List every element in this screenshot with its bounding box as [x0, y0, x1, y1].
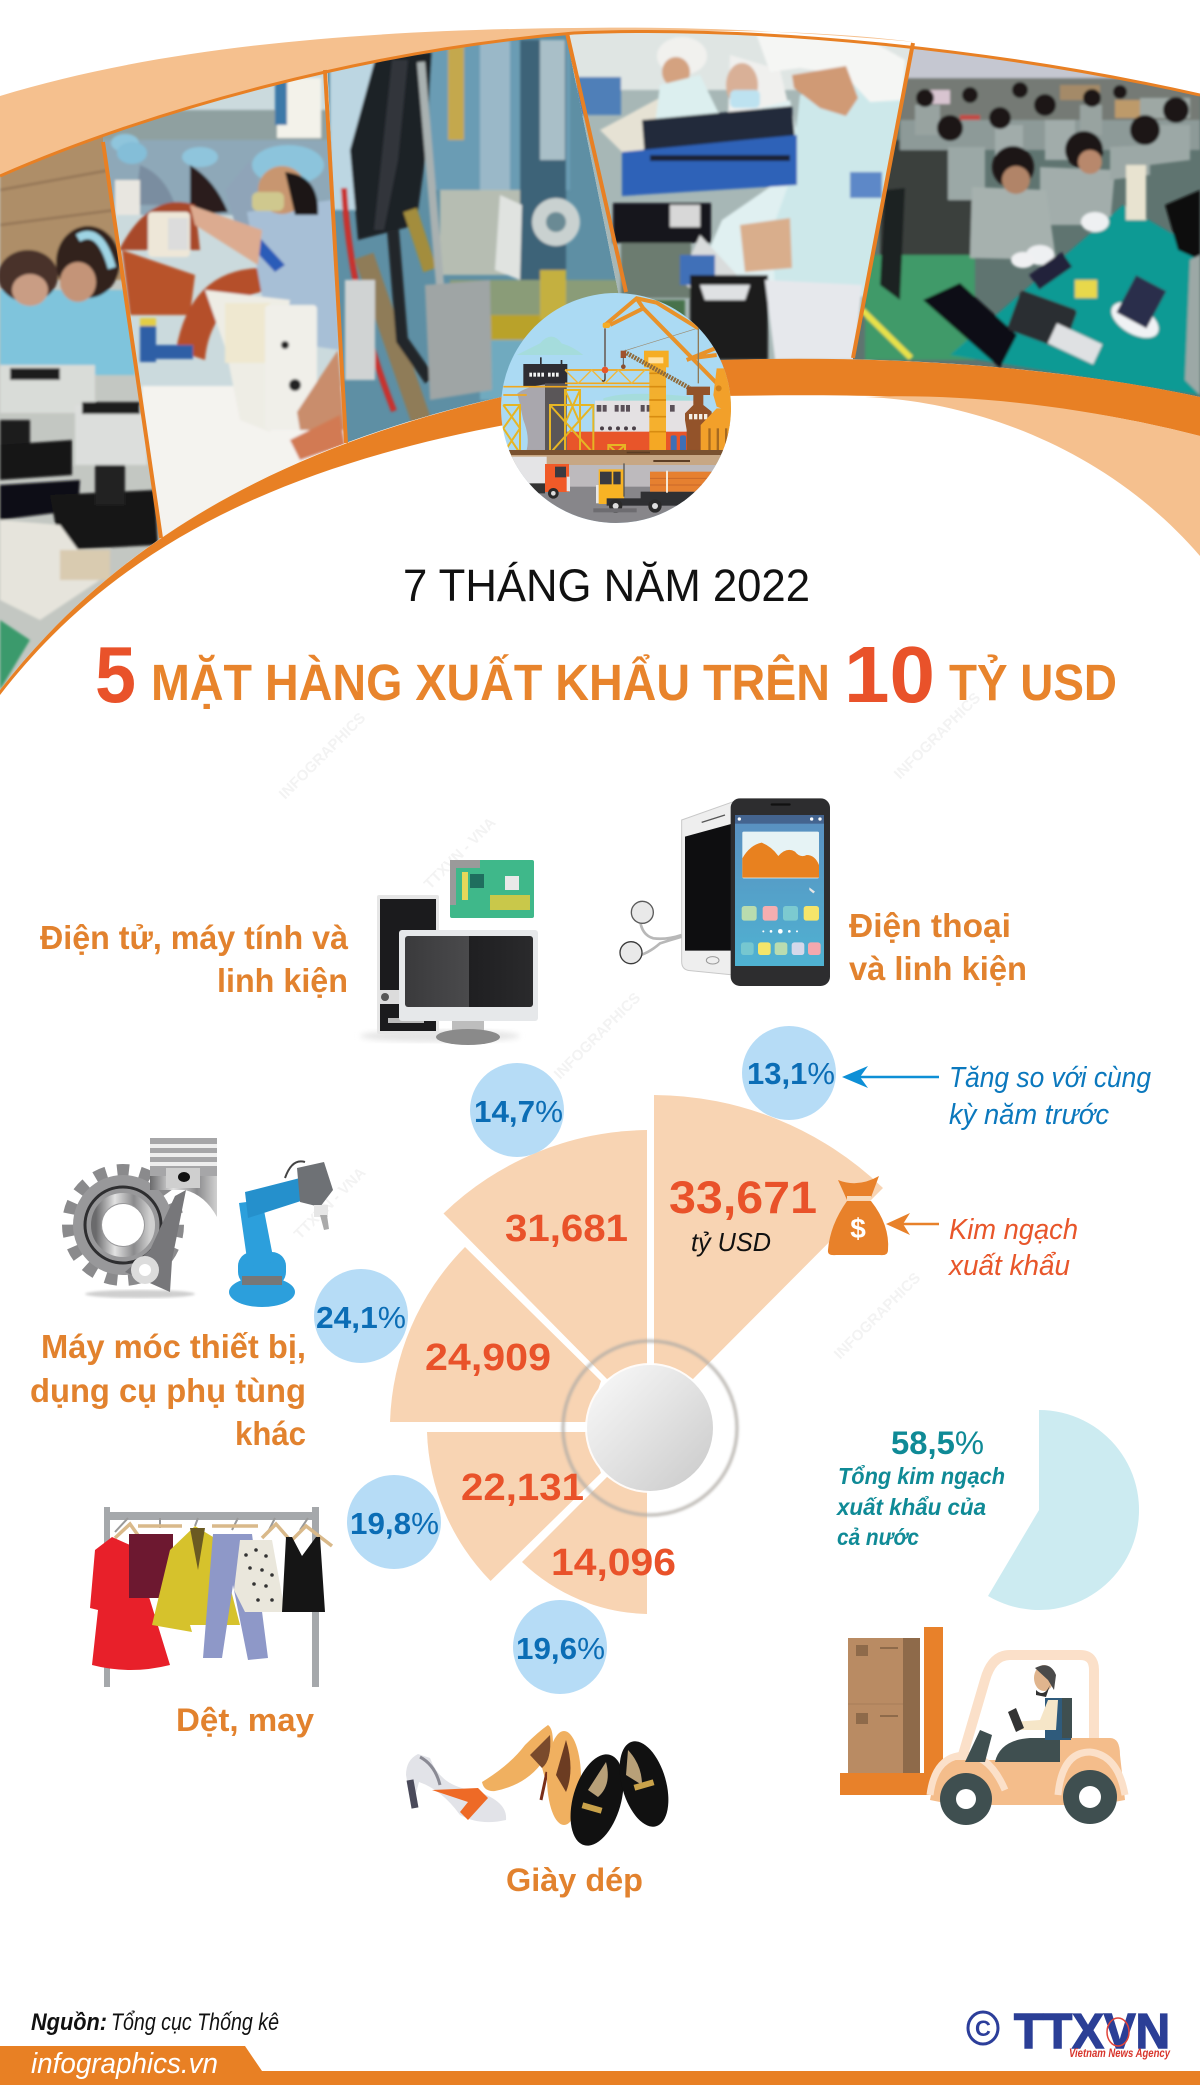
arrow: growth legend — [842, 1066, 939, 1088]
label: electronics: linh kiện — [217, 962, 348, 999]
text: export legend — [947, 1214, 1078, 1282]
main title — [95, 630, 1117, 719]
growth bubble 13,1% — [742, 1026, 836, 1120]
main title: 5 — [95, 630, 136, 719]
watermark: INFOGRAPHICS — [891, 689, 984, 783]
values: 22,131 — [461, 1467, 584, 1509]
icon: forklift — [840, 1627, 1125, 1825]
sector: footwear 14,096 — [522, 1477, 647, 1614]
photo borders — [0, 32, 1200, 538]
values: 33,671 — [669, 1172, 817, 1223]
icon: port industrial circle — [500, 290, 737, 527]
text: growth legend: kỳ năm trước — [949, 1099, 1109, 1131]
icon: robot arm — [229, 1161, 333, 1307]
text: growth legend: Tăng so với cùng — [949, 1062, 1151, 1094]
photo: shoe factory — [0, 137, 161, 690]
source: Nguồn: — [31, 2009, 107, 2036]
growth bubble 13,1%: 13,1% — [747, 1056, 835, 1091]
growth bubble 14,7%: 14,7% — [474, 1094, 563, 1129]
growth bubble 19,8%: 19,8% — [350, 1506, 439, 1541]
watermark — [276, 689, 984, 1363]
icon: clothes rack — [90, 1507, 332, 1687]
icon: shoes — [406, 1725, 677, 1852]
sector: textiles 22,131 — [427, 1432, 601, 1581]
main title: 10 — [844, 630, 935, 719]
label: electronics: Điện tử, máy tính và — [40, 919, 349, 956]
photo: electronics assembly — [570, 33, 910, 360]
watermark: TTXVN - VNA — [291, 1164, 370, 1243]
watermark: INFOGRAPHICS — [551, 989, 644, 1083]
text: export legend: Kim ngạch — [949, 1214, 1078, 1246]
photo strip — [0, 20, 1200, 720]
icon: gear and piston — [68, 1138, 217, 1298]
icon: smartphones — [620, 798, 830, 986]
label: machinery: Máy móc thiết bị, — [41, 1328, 306, 1365]
text: growth legend — [949, 1062, 1151, 1131]
label: footwear: Giày dép — [506, 1862, 643, 1898]
growth bubble 19,8% — [347, 1475, 441, 1569]
label: electronics — [40, 919, 349, 999]
logo: TTXVN: C — [975, 2016, 991, 2041]
values: 14,096 — [551, 1542, 676, 1584]
values: 31,681 — [505, 1208, 628, 1250]
watermark: TTXVN - VNA — [421, 814, 500, 893]
text: export legend: xuất khẩu — [947, 1250, 1070, 1282]
title line: 7 THÁNG NĂM 2022 — [403, 560, 810, 611]
text: share of national export: 58,5% — [891, 1425, 984, 1461]
text: share of national export: Tổng kim ngạch — [838, 1463, 1005, 1489]
sector: phones 33,671 — [654, 1095, 883, 1379]
label: phones: Điện thoại — [849, 907, 1011, 944]
label: machinery: dụng cụ phụ tùng — [30, 1372, 306, 1409]
label: phones — [849, 907, 1027, 987]
label: machinery — [30, 1328, 306, 1452]
values — [425, 1172, 817, 1584]
icon: computer — [360, 860, 538, 1045]
logo: TTXVN: TTXVN — [1014, 2005, 1170, 2059]
orange band left — [0, 395, 510, 695]
photo: machinery hoses — [328, 35, 618, 442]
main title: TỶ USD — [949, 653, 1117, 711]
growth bubble 14,7% — [470, 1063, 564, 1157]
center hub — [563, 1341, 737, 1515]
photo: garment sewing — [103, 74, 346, 536]
logo: TTXVN: Vietnam News Agency — [1069, 2048, 1170, 2060]
top light orange arc — [0, 28, 915, 176]
text: share of national export: cả nước — [837, 1524, 919, 1550]
values: 24,909 — [425, 1337, 551, 1379]
unit: tỷ USD — [691, 1227, 771, 1257]
source: Tổng cục Thống kê — [111, 2009, 279, 2036]
growth bubble 24,1%: 24,1% — [316, 1300, 406, 1335]
sector: machinery 24,909 — [390, 1247, 601, 1422]
label: phones: và linh kiện — [849, 950, 1027, 987]
icon: money bag: $ — [850, 1213, 866, 1244]
growth bubble 19,6% — [513, 1600, 607, 1694]
chart: export turnover fan — [390, 1095, 883, 1614]
watermark: INFOGRAPHICS — [276, 709, 369, 803]
orange band right — [720, 359, 1200, 436]
label: machinery: khác — [235, 1415, 306, 1452]
light orange wedge right — [865, 396, 1200, 556]
footer bar — [0, 2046, 1200, 2085]
chart: share of national export — [988, 1410, 1139, 1610]
main title: MẶT HÀNG XUẤT KHẨU TRÊN — [151, 653, 830, 711]
sector: electronics 31,681 — [444, 1130, 647, 1379]
text: share of national export — [835, 1425, 1005, 1550]
watermark: INFOGRAPHICS — [831, 1269, 924, 1363]
website: infographics.vn — [31, 2048, 218, 2080]
label: textiles: Dệt, may — [176, 1702, 314, 1738]
growth bubble 24,1% — [314, 1269, 408, 1363]
icon: money bag — [828, 1176, 888, 1255]
arrow: export legend — [886, 1213, 939, 1235]
growth bubble 19,6%: 19,6% — [516, 1631, 605, 1666]
source — [31, 2009, 279, 2036]
photo: phone assembly line — [853, 49, 1200, 397]
text: share of national export: xuất khẩu của — [835, 1494, 986, 1520]
